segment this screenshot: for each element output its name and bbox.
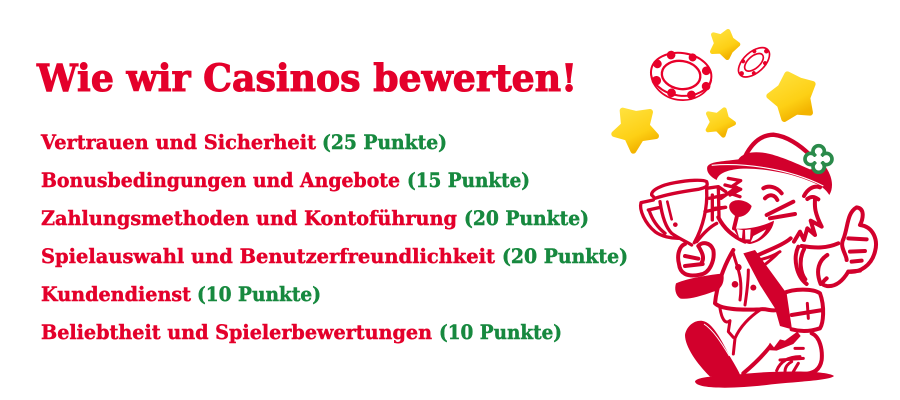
- criterion: Beliebtheit und Spielerbewertungen: Beliebtheit und Spielerbewertungen: [41, 320, 432, 344]
- nose: [729, 200, 752, 217]
- collar flap: [758, 252, 780, 268]
- face line left: [718, 217, 745, 242]
- criterion: Vertrauen und Sicherheit: (25 Punkte): [322, 130, 447, 154]
- criterion: Kundendienst: Kundendienst: [41, 282, 192, 306]
- criterion: Spielauswahl und Benutzerfreundlichkeit: (20 Punkte): [502, 244, 628, 268]
- illustration: thumbs-up arm: [796, 207, 876, 286]
- criterion: Bonusbedingungen und Angebote: Bonusbedingungen und Angebote: [41, 168, 400, 192]
- criterion: Beliebtheit und Spielerbewertungen: (10 Punkte): [439, 320, 562, 344]
- criterion: Vertrauen und Sicherheit: Vertrauen und Sicherheit: [40, 130, 317, 154]
- face line: [734, 217, 737, 228]
- icon: small poker chip: [733, 42, 775, 83]
- trophy exclamation mark: [667, 202, 672, 219]
- right eye and cheek: [794, 187, 822, 242]
- trophy mark dot: [673, 222, 678, 227]
- trophy rim: [652, 180, 707, 198]
- ground shadow: [695, 371, 834, 388]
- illustration: beaver head and hat: [707, 135, 832, 257]
- button right: [750, 285, 756, 291]
- right foot detail: [777, 348, 803, 372]
- button lower: [732, 281, 738, 288]
- illustration: beaver lower body: [685, 250, 834, 388]
- hat brim: [707, 152, 832, 195]
- criterion: Zahlungsmethoden und Kontoführung: (20 Punkte): [464, 206, 589, 230]
- head fringe left: [715, 185, 740, 208]
- hat crown: [745, 135, 810, 157]
- foot highlight: [704, 324, 729, 356]
- button top: [735, 264, 742, 271]
- whiskers: [767, 202, 795, 218]
- satchel bag: [783, 290, 823, 331]
- teeth: [737, 229, 766, 242]
- criterion: Bonusbedingungen und Angebote: (15 Punkte): [407, 168, 530, 192]
- criterion: Kundendienst: (10 Punkte): [197, 282, 321, 306]
- icon: small lower star: [708, 110, 734, 135]
- criterion: Kundendienst: [41, 282, 321, 306]
- collar fur: [755, 238, 791, 257]
- illustration: beaver trophy: [641, 180, 745, 245]
- icon: left star: [614, 111, 656, 151]
- criterion: Zahlungsmethoden und Kontoführung: Zahlungsmethoden und Kontoführung: [41, 206, 457, 230]
- trophy handle: [641, 200, 678, 238]
- right leg dark fold: [766, 332, 801, 351]
- right leg: [743, 333, 822, 374]
- torso: [720, 308, 760, 354]
- left foot: [685, 321, 741, 377]
- fringe left of hat brim: [728, 178, 741, 195]
- bag strap: [743, 250, 792, 329]
- jacket outline: [715, 250, 777, 310]
- hat highlight: [712, 165, 823, 186]
- winking eye: [763, 187, 782, 200]
- jacket lapels: [733, 253, 748, 305]
- hand holding trophy: [678, 243, 714, 275]
- icon: large poker chip: [648, 48, 715, 104]
- trophy cup: [660, 190, 707, 245]
- title: Wie wir Casinos bewerten!: [36, 56, 577, 100]
- trophy base: [675, 273, 724, 299]
- icon: four-leaf clover: [805, 146, 832, 172]
- icon: large star: [769, 74, 813, 119]
- trophy right handle: [697, 187, 726, 242]
- bag clasp: [803, 303, 813, 318]
- mouth: [733, 221, 774, 244]
- icon: top star: [712, 31, 738, 58]
- criteria list: [40, 130, 628, 344]
- criterion: Vertrauen und Sicherheit: [40, 130, 447, 154]
- illustration: stars and chips: [614, 31, 813, 151]
- criterion: Spielauswahl und Benutzerfreundlichkeit: Spielauswahl und Benutzerfreundlichkeit: [41, 244, 496, 268]
